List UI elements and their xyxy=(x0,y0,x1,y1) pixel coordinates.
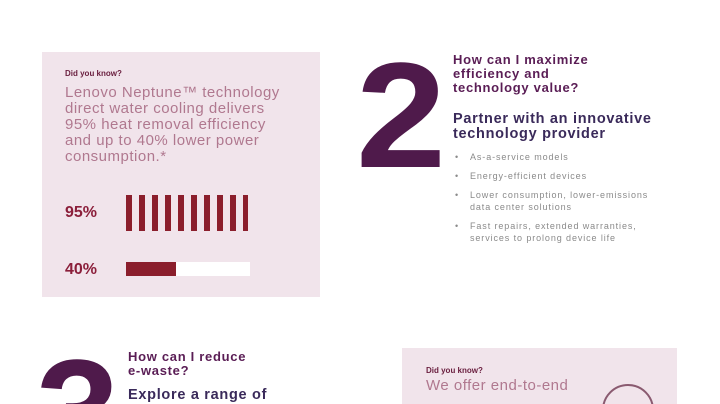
text: neptune fact: 95% heat removal efficiency xyxy=(65,116,266,133)
list: benefits: services to prolong device life xyxy=(470,233,616,243)
text: neptune fact: direct water cooling delivers xyxy=(65,100,265,117)
subheading: partner: Partner with an innovative xyxy=(453,111,652,127)
text: neptune fact: and up to 40% lower power xyxy=(65,132,259,149)
heading: reduce e-waste xyxy=(128,349,246,378)
list: benefits xyxy=(455,152,648,243)
number 2: 2 xyxy=(356,31,446,199)
heading: reduce e-waste: e-waste? xyxy=(128,363,189,378)
subheading: partner xyxy=(453,111,652,142)
text: neptune fact: Lenovo Neptune™ technology xyxy=(65,84,280,101)
list: benefits: As-a-service models xyxy=(470,152,569,162)
list: benefits: Lower consumption, lower-emissions xyxy=(470,190,648,200)
heading: maximize efficiency: technology value? xyxy=(453,80,579,95)
list: benefits: data center solutions xyxy=(470,202,572,212)
chart: 95% bars xyxy=(126,195,248,231)
list: benefits: Fast repairs, extended warranties, xyxy=(470,221,637,231)
chart: 40% bar xyxy=(126,262,250,276)
label: 95%: 95% xyxy=(65,204,97,221)
subheading: explore: Explore a range of xyxy=(128,387,267,403)
heading: maximize efficiency xyxy=(453,52,588,95)
text: neptune fact xyxy=(65,84,280,165)
text: end-to-end: We offer end-to-end xyxy=(426,377,568,394)
panel: did you know end-to-end xyxy=(402,348,677,404)
panel: did you know neptune xyxy=(42,52,320,297)
list: benefits: Energy-efficient devices xyxy=(470,171,587,181)
label: did you know: Did you know? xyxy=(426,366,483,375)
heading: maximize efficiency: How can I maximize xyxy=(453,52,588,67)
label: did you know: Did you know? xyxy=(65,69,122,78)
heading: maximize efficiency: efficiency and xyxy=(453,66,550,81)
heading: reduce e-waste: How can I reduce xyxy=(128,349,246,364)
subheading: partner: technology provider xyxy=(453,126,606,142)
text: neptune fact: consumption.* xyxy=(65,148,167,165)
icon: circle xyxy=(602,384,654,404)
label: 40%: 40% xyxy=(65,261,97,278)
